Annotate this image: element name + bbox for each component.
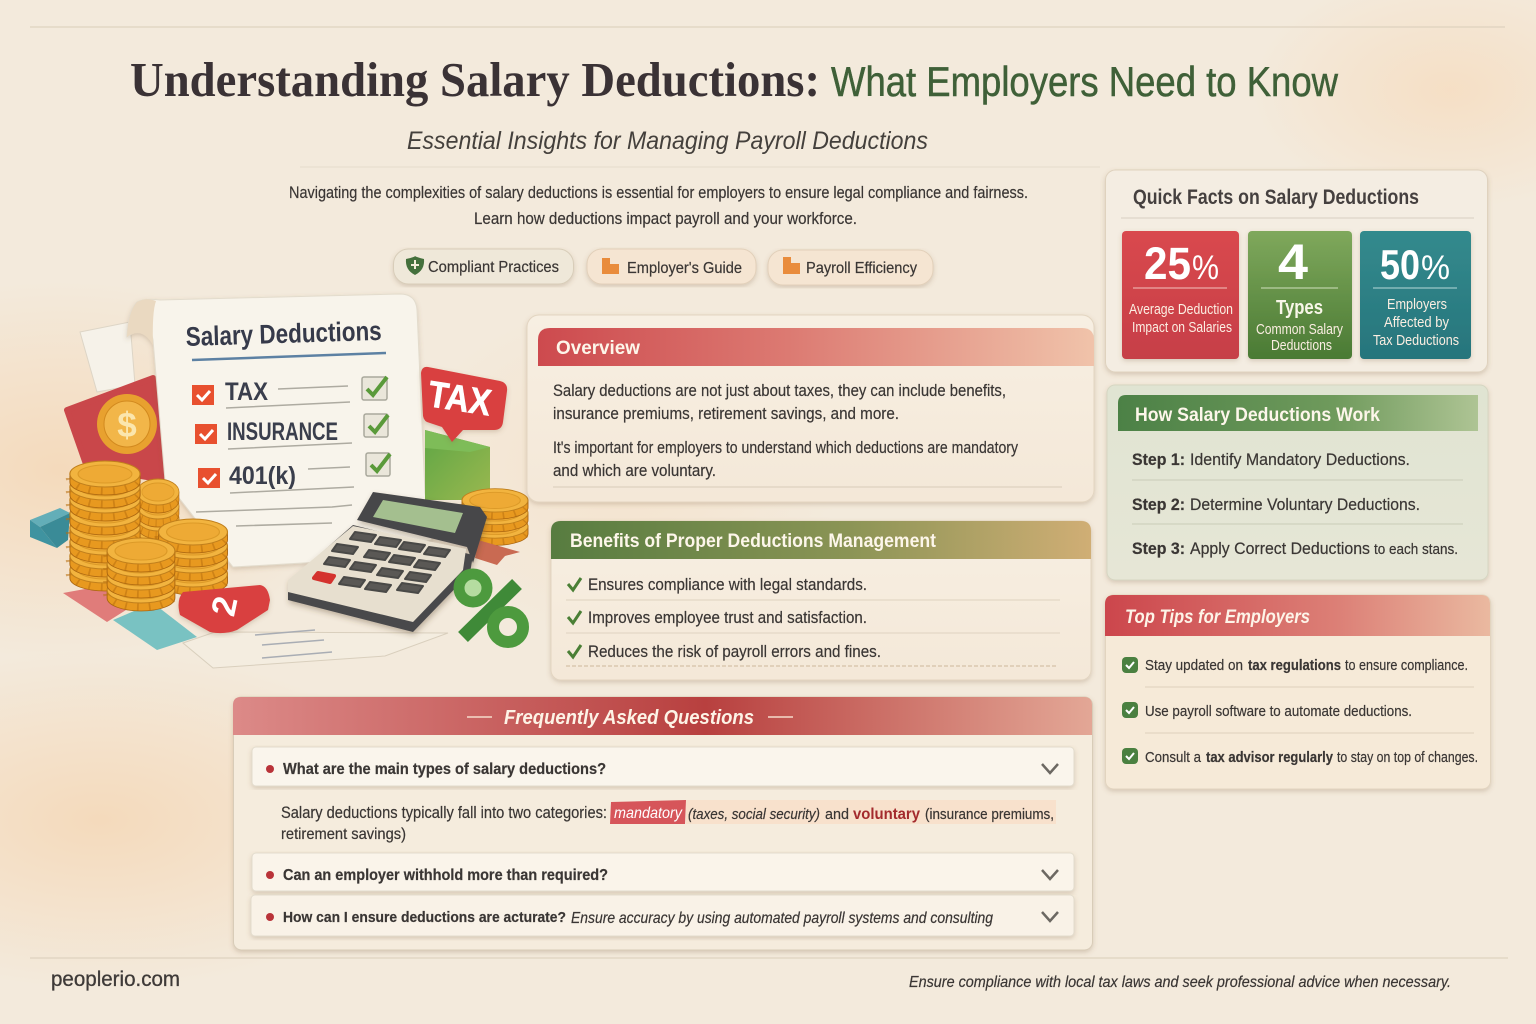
tip 3: Consult a xyxy=(1145,749,1202,766)
faq answer 1: (taxes, social security) xyxy=(688,806,820,823)
panel: benefits: Benefits of Proper Deductions Management xyxy=(570,531,937,552)
faq question 2: Can an employer withhold more than required? xyxy=(283,867,608,884)
checklist paper xyxy=(127,294,432,567)
red card with gold coin xyxy=(67,378,165,480)
panel: overview: and which are voluntary. xyxy=(553,461,716,480)
intro text: Navigating the complexities of salary deductions is essential for employers to ensure legal compliance and fairness. xyxy=(289,183,1028,202)
fact card: 50%: % xyxy=(1421,249,1450,287)
panel: quick facts xyxy=(1106,170,1488,372)
tip 1: Stay updated on xyxy=(1145,657,1243,674)
fact card: 25%: Average Deduction xyxy=(1129,301,1233,318)
faq answer 1: and xyxy=(825,806,849,823)
faq heading: Frequently Asked Questions xyxy=(504,707,754,729)
title: What Employers Need to Know xyxy=(831,58,1339,105)
red card with gold coin: $ xyxy=(117,406,137,445)
illustration: salary deductions desk scene xyxy=(30,294,528,668)
tip 3: to stay on top of changes. xyxy=(1337,749,1478,766)
faq question 3: Ensure accuracy by using automated payroll systems and consulting xyxy=(571,910,993,927)
faq answer 1: retirement savings) xyxy=(281,826,406,843)
tip 1: to ensure compliance. xyxy=(1345,657,1468,674)
red tile: 2 xyxy=(204,593,246,619)
subtitle: Essential Insights for Managing Payroll Deductions xyxy=(407,127,928,155)
panel: overview: Salary deductions are not just about taxes, they can include benefits, xyxy=(553,381,1006,400)
fact card: 4 types: Common Salary xyxy=(1256,321,1343,338)
fact card: 25%: Impact on Salaries xyxy=(1132,319,1232,336)
faq question 1: What are the main types of salary deductions? xyxy=(283,761,606,778)
tip 3: tax advisor regularly xyxy=(1206,749,1334,766)
tip 2 xyxy=(1122,702,1474,733)
tip 1: tax regulations xyxy=(1248,657,1341,674)
tax speech bubble xyxy=(421,367,507,442)
red tile xyxy=(179,585,270,633)
chip: compliant practices: Compliant Practices xyxy=(428,259,559,276)
panel: quick facts: Quick Facts on Salary Deductions xyxy=(1133,186,1419,209)
faq question 2 xyxy=(252,853,1074,891)
panel: overview xyxy=(527,315,1094,502)
panel: overview: Overview xyxy=(556,338,640,359)
checklist rows: TAX xyxy=(225,378,268,406)
panel: overview: insurance premiums, retirement savings, and more. xyxy=(553,404,899,423)
checklist rows: INSURANCE xyxy=(227,418,338,446)
tip 3 xyxy=(1122,748,1478,766)
panel: benefits: Reduces the risk of payroll errors and fines. xyxy=(588,642,881,661)
fact card: 50%: 50 xyxy=(1380,241,1420,288)
fact card: 50%: Employers xyxy=(1387,296,1447,313)
paper heading: Salary Deductions xyxy=(185,316,382,352)
red ribbon xyxy=(475,540,520,565)
panel: top tips: Top Tips for Employers xyxy=(1125,607,1310,628)
green box xyxy=(425,430,490,500)
faq question 3 xyxy=(251,895,1074,936)
chip: payroll efficiency xyxy=(768,250,933,285)
checklist rows xyxy=(192,377,390,526)
panel: top tips xyxy=(1105,595,1490,789)
panel: overview: It's important for employers to understand which deductions are mandatory xyxy=(553,438,1018,457)
panel: how deductions work: How Salary Deductions Work xyxy=(1135,405,1380,426)
panel: how deductions work: Step 1: xyxy=(1132,450,1185,469)
intro text: Learn how deductions impact payroll and your workforce. xyxy=(474,209,857,228)
panel: how deductions work: Apply Correct Deductions xyxy=(1190,539,1370,558)
checklist rows: 401(k) xyxy=(229,462,296,490)
coin stacks xyxy=(70,461,528,611)
chip: payroll efficiency: Payroll Efficiency xyxy=(806,260,917,277)
teal block xyxy=(30,508,70,548)
panel: benefits: Ensures compliance with legal standards. xyxy=(588,575,867,594)
tax speech bubble: TAX xyxy=(425,373,494,424)
faq question 3: How can I ensure deductions are acturate? xyxy=(283,909,566,926)
coloured papers xyxy=(63,585,137,622)
footer brand: peoplerio.com xyxy=(51,968,180,991)
panel: how deductions work: Step 2: xyxy=(1132,495,1185,514)
footer note: Ensure compliance with local tax laws and seek professional advice when necessary. xyxy=(909,974,1451,991)
title xyxy=(130,52,1340,113)
panel: benefits: Improves employee trust and satisfaction. xyxy=(588,608,867,627)
fact card: 50%: Affected by xyxy=(1384,314,1449,331)
chip: employer's guide: Employer's Guide xyxy=(627,260,742,277)
panel: how deductions work: Identify Mandatory Deductions. xyxy=(1190,450,1410,469)
rolled paper behind xyxy=(80,322,135,392)
intro text xyxy=(289,167,1100,228)
panel: how deductions work: to each stans. xyxy=(1374,541,1458,558)
fact card: 25%: % xyxy=(1192,249,1219,287)
panel: faq xyxy=(233,697,1092,950)
percent symbol xyxy=(459,574,523,642)
panel: how deductions work xyxy=(1107,385,1488,580)
bottom receipt xyxy=(183,630,448,668)
chip: compliant practices xyxy=(394,249,574,284)
fact card: 4 types: Deductions xyxy=(1271,337,1332,354)
panel: how deductions work: Step 3: xyxy=(1132,539,1185,558)
fact card: 4 types: 4 xyxy=(1278,234,1308,290)
faq answer 1: mandatory xyxy=(614,805,683,822)
fact card: 25%: 25 xyxy=(1144,238,1191,289)
fact card: 4 types xyxy=(1248,231,1352,359)
title: Understanding Salary Deductions: xyxy=(130,52,820,107)
fact card: 25% xyxy=(1122,231,1239,359)
fact card: 50% xyxy=(1360,231,1471,359)
tip 2: Use payroll software to automate deductions. xyxy=(1145,703,1412,720)
panel: how deductions work: Determine Voluntary Deductions. xyxy=(1190,495,1420,514)
faq answer 1 xyxy=(281,800,1056,843)
faq answer 1: voluntary xyxy=(853,806,920,823)
calculator xyxy=(288,492,487,632)
faq answer 1: Salary deductions typically fall into two categories: xyxy=(281,803,607,822)
fact card: 50%: Tax Deductions xyxy=(1373,332,1459,349)
faq question 1 xyxy=(252,747,1074,786)
fact card: 4 types: Types xyxy=(1276,297,1323,319)
chip: employer's guide xyxy=(587,249,756,284)
faq answer 1: (insurance premiums, xyxy=(925,806,1054,823)
panel: benefits xyxy=(551,521,1091,680)
tip 1 xyxy=(1122,657,1474,687)
